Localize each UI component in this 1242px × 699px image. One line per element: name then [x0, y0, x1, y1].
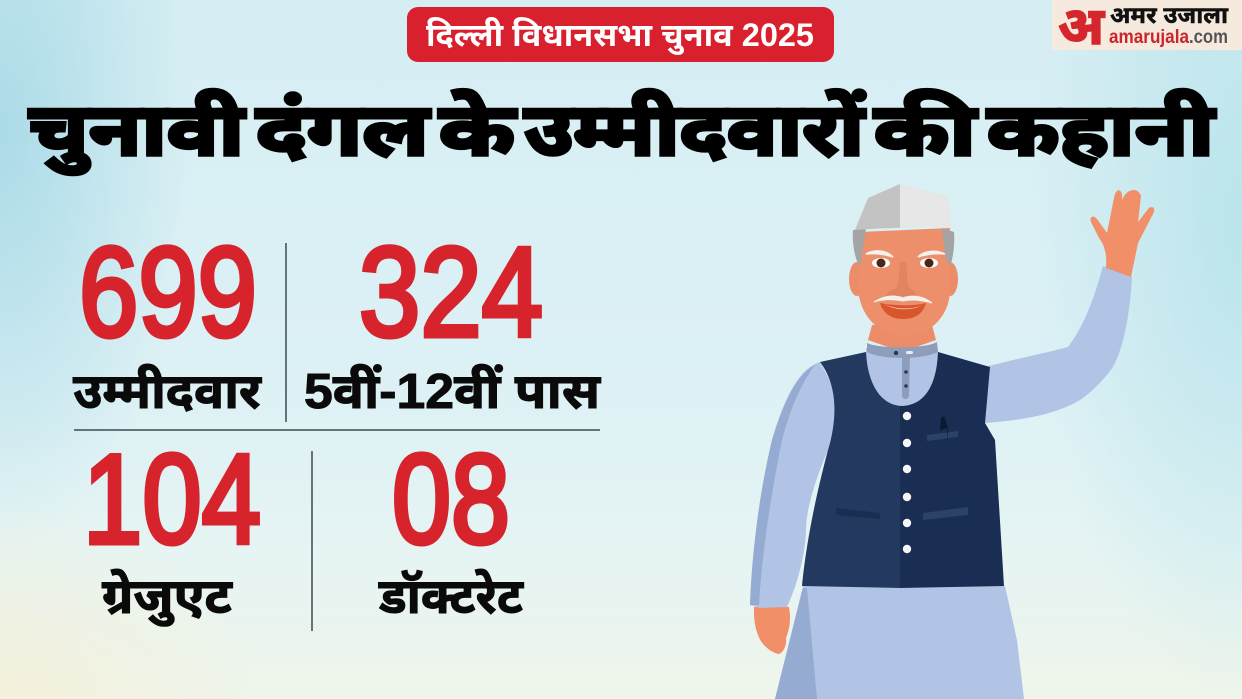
stat: 104 graduates: ग्रेजुएट: [102, 568, 234, 628]
stat: 699 candidates: 699: [79, 221, 257, 363]
stat: 08 doctorates: डॉक्टरेट: [378, 568, 525, 624]
lower pockets: [836, 508, 880, 519]
stats grid dividers: [74, 243, 600, 631]
left sleeve shade: [750, 365, 815, 605]
collar: [867, 342, 938, 358]
left sleeve: [750, 362, 840, 608]
stat: 324 5th to 12th pass: [304, 221, 601, 419]
placket: [902, 355, 910, 399]
stat: 699 candidates: उम्मीदवार: [73, 363, 262, 419]
logo: Amar Ujala: .com: [1189, 27, 1228, 48]
ears: [849, 262, 865, 296]
vest buttons: [903, 412, 911, 553]
eyebrows: [866, 251, 893, 257]
stat: 08 doctorates: [378, 428, 525, 624]
chest pocket and pen: [927, 416, 958, 444]
kurta lower: [775, 586, 1024, 699]
kurta chest: [866, 348, 938, 406]
title: [29, 88, 1216, 175]
stat: 104 graduates: [83, 428, 261, 628]
right arm: [985, 266, 1132, 423]
vest left: [802, 350, 900, 588]
stat: 324 5th to 12th pass: 324: [359, 221, 543, 363]
title: के: [439, 88, 517, 171]
logo: Amar Ujala: amarujala: [1109, 27, 1189, 48]
badge: election label: दिल्ली विधानसभा चुनाव 2025: [426, 17, 814, 55]
title: की: [874, 89, 978, 171]
badge: election label: [407, 7, 834, 62]
stat: 104 graduates: 104: [83, 428, 261, 570]
title: दंगल: [256, 90, 430, 171]
face: [858, 228, 950, 336]
nose: [886, 262, 916, 296]
left hand: [754, 607, 790, 654]
title: कहानी: [987, 89, 1216, 171]
eyes: [872, 258, 890, 268]
cap: [855, 184, 900, 230]
stat: 699 candidates: [73, 221, 262, 419]
title: उम्मीदवारों: [524, 89, 866, 171]
kurta shadow fold: [775, 588, 817, 699]
neck: [868, 325, 936, 352]
logo: Amar Ujala: [1052, 0, 1242, 56]
logo: Amar Ujala: अमर उजाला: [1110, 2, 1229, 28]
title: चुनावी: [29, 89, 246, 175]
stat: 324 5th to 12th pass: 5वीं-12वीं पास: [304, 364, 601, 419]
mouth: [880, 303, 926, 319]
collar buttons: [894, 351, 913, 388]
illustration: waving politician: [750, 184, 1154, 699]
hair: [853, 228, 866, 267]
stat: 08 doctorates: 08: [392, 428, 510, 570]
moustache: [874, 296, 932, 303]
vest right: [900, 350, 1004, 588]
waving hand: [1091, 190, 1154, 277]
